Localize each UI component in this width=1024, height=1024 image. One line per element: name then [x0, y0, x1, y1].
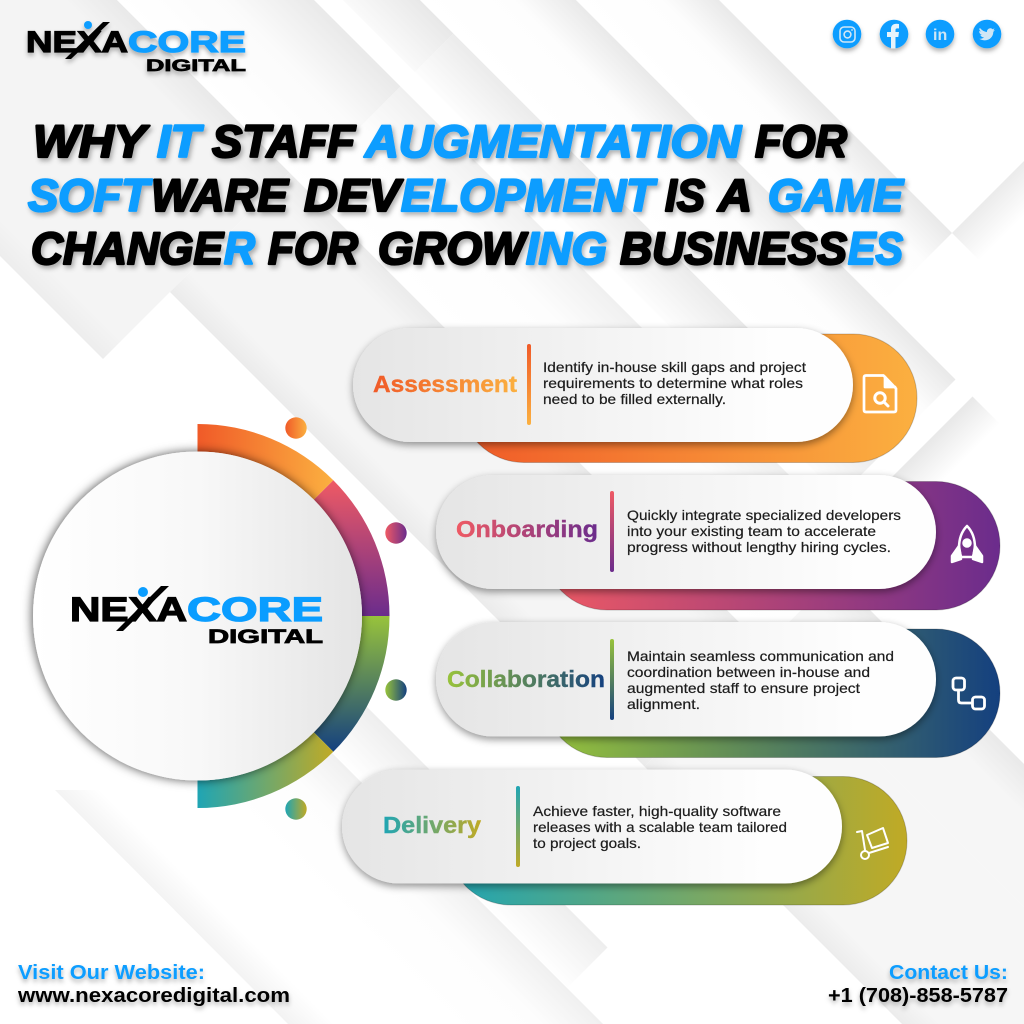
- arc segment: teal yellow: [198, 732, 333, 808]
- title: DEV: [304, 170, 404, 221]
- footer: contact: [828, 962, 1008, 1007]
- logo: top left: NEXA: [26, 26, 128, 59]
- title: IT: [157, 116, 204, 167]
- label: Collaboration: [447, 666, 605, 692]
- icon: facebook: [880, 20, 908, 48]
- title: IS: [665, 170, 705, 221]
- text: Quickly integrate specialized developers: [627, 507, 901, 523]
- logo: centre: NEXA: [70, 591, 187, 629]
- title: WHY: [33, 116, 150, 167]
- hub circle with arc: [33, 417, 407, 820]
- text: releases with a scalable team tailored: [533, 819, 787, 835]
- arc segment: orange: [198, 424, 333, 500]
- footer: website: [17, 962, 290, 1007]
- divider: [527, 344, 531, 425]
- arc segment: red purple: [314, 480, 390, 616]
- panel: onboarding: [436, 475, 1000, 610]
- logo: top left: CORE: [128, 26, 246, 59]
- social icons: [833, 20, 1001, 48]
- footer: contact: +1 (708)-858-5787: [828, 985, 1008, 1007]
- circle: [33, 452, 362, 780]
- divider: [610, 639, 614, 720]
- divider: [610, 491, 614, 572]
- title: GAME: [768, 170, 905, 221]
- dots: [285, 417, 407, 820]
- title: CHANGE: [31, 223, 225, 274]
- title: BUSINESS: [620, 223, 847, 274]
- label: Delivery: [383, 812, 481, 838]
- title: STAFF: [212, 116, 357, 167]
- text: progress without lengthy hiring cycles.: [627, 539, 891, 555]
- arc segment: green navy: [314, 616, 390, 752]
- icon: hand truck: [857, 828, 888, 859]
- logo: centre: [70, 586, 323, 648]
- footer: website: Visit Our Website:: [18, 962, 205, 984]
- title: FOR: [268, 223, 358, 274]
- title: R: [224, 223, 255, 274]
- title: SOFT: [28, 170, 153, 221]
- text: [627, 648, 894, 712]
- icon: linkedin: [926, 20, 954, 48]
- icon: connected nodes: [953, 678, 984, 709]
- text: to project goals.: [533, 835, 641, 851]
- icon: twitter: [973, 20, 1001, 48]
- panel: collaboration: [436, 622, 1000, 758]
- logo: top left: DIGITAL: [146, 57, 246, 75]
- text: alignment.: [627, 696, 700, 712]
- text: Identify in-house skill gaps and project: [543, 359, 806, 375]
- footer: website: www.nexacoredigital.com: [17, 985, 290, 1007]
- text: augmented staff to ensure project: [627, 680, 860, 696]
- text: need to be filled externally.: [543, 391, 726, 407]
- text: [543, 359, 806, 407]
- label: Onboarding: [456, 516, 598, 542]
- footer: contact: Contact Us:: [889, 962, 1008, 984]
- panel: assessment: [353, 328, 917, 462]
- text: [627, 507, 901, 555]
- title: AUGMENTATION: [364, 116, 743, 167]
- title: A: [717, 170, 752, 221]
- icon: document search: [864, 376, 896, 412]
- title: FOR: [755, 116, 847, 167]
- icon: instagram: [833, 20, 861, 48]
- label: Assessment: [373, 371, 517, 397]
- text: coordination between in-house and: [627, 664, 870, 680]
- text: requirements to determine what roles: [543, 375, 803, 391]
- text: Maintain seamless communication and: [627, 648, 894, 664]
- title: ING: [526, 223, 607, 274]
- text: into your existing team to accelerate: [627, 523, 876, 539]
- icon: linkedin: in: [933, 27, 947, 44]
- title: ES: [848, 223, 903, 274]
- logo: centre: CORE: [187, 591, 323, 629]
- icon: rocket: [952, 526, 982, 562]
- logo: centre: DIGITAL: [208, 626, 323, 648]
- title: WARE: [151, 170, 290, 221]
- text: [533, 803, 787, 851]
- text: Achieve faster, high-quality software: [533, 803, 781, 819]
- title: ELOPMENT: [401, 170, 658, 221]
- divider: [516, 786, 520, 867]
- title: GROW: [378, 223, 529, 274]
- title: [28, 116, 905, 274]
- panel: delivery: [342, 770, 907, 905]
- logo: top left: [26, 21, 246, 75]
